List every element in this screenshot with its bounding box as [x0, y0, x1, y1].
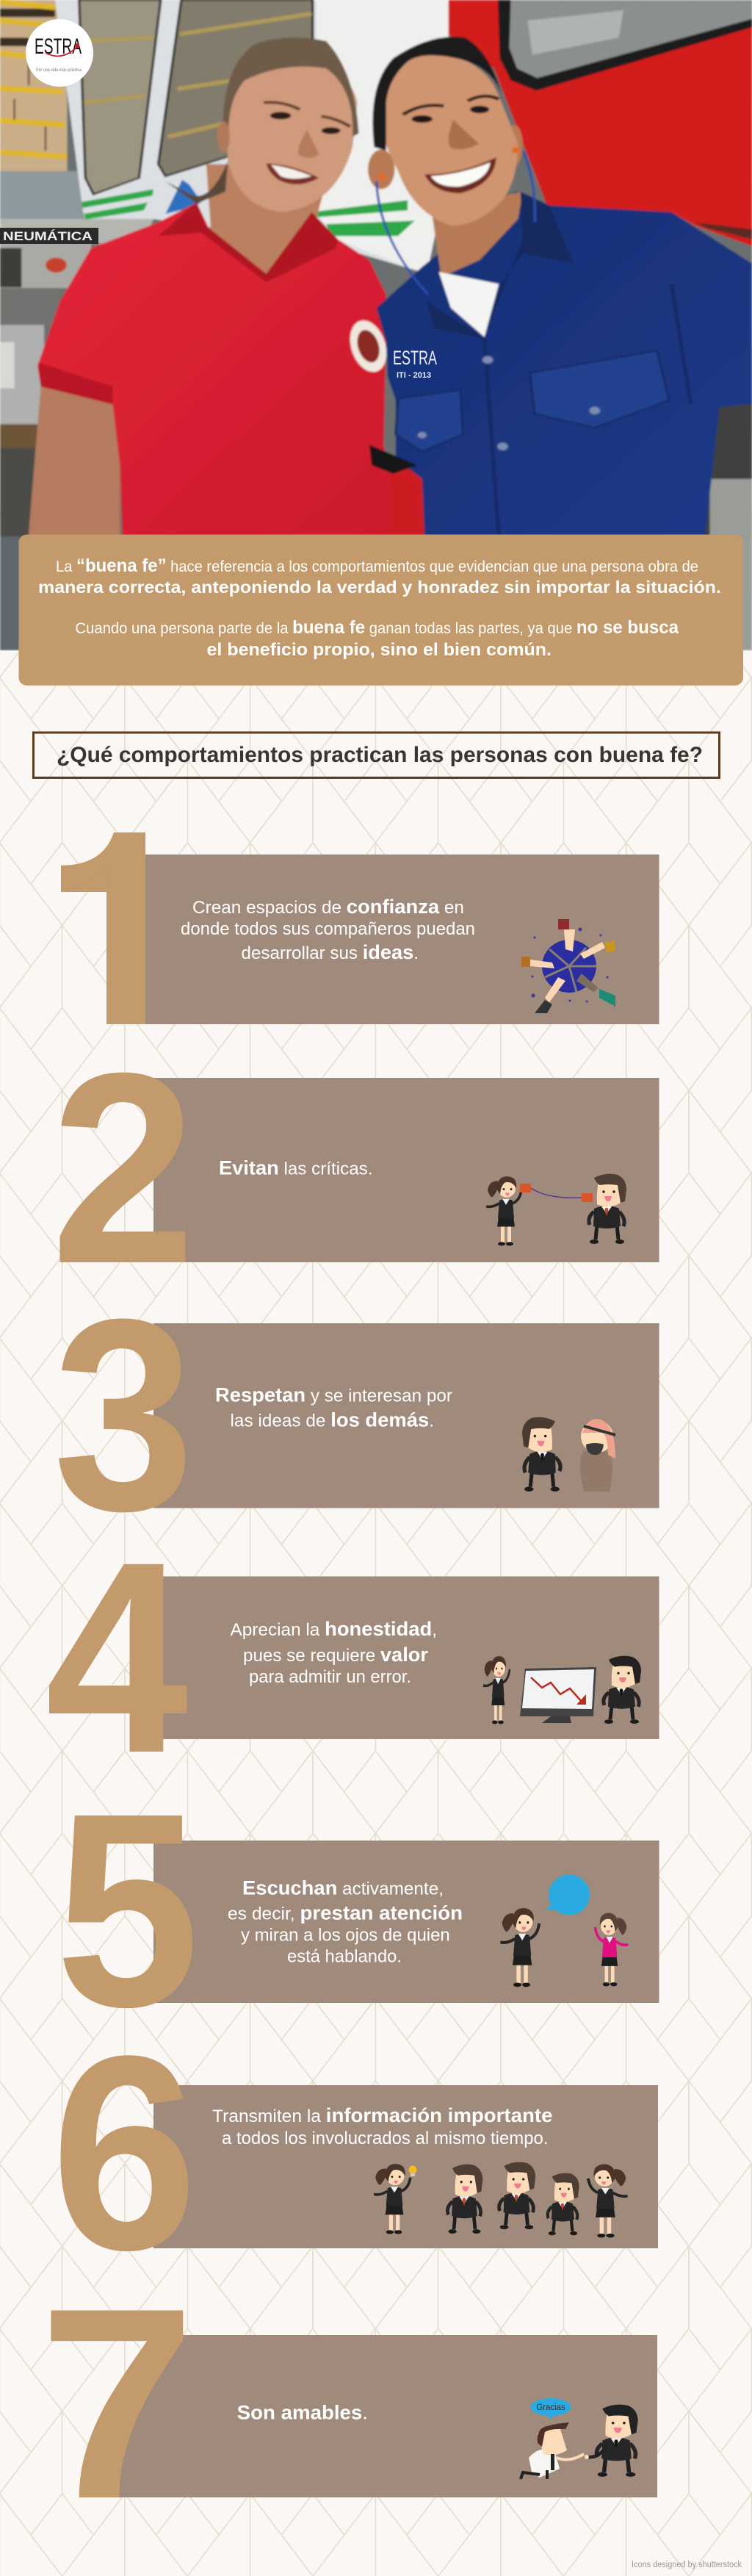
banner 4: [162, 1577, 659, 1739]
number 6: 6: [51, 1998, 198, 2308]
icon: handshake and thank-you bubble: Gracias: [536, 2403, 565, 2412]
shirt logo: ITI - 2013: [397, 371, 431, 380]
icon: handshake and thank-you bubble: [521, 2398, 638, 2479]
number 1: [61, 832, 145, 1024]
banner 2: [153, 1078, 659, 1262]
text 1: desarrollar sus ideas.: [241, 941, 419, 963]
section heading: ¿Qué comportamientos practican las personas con buena fe?: [57, 743, 703, 767]
icon: monitor with falling chart: [483, 1656, 641, 1724]
item 4: [46, 1506, 659, 1810]
banner 5: [153, 1841, 659, 2003]
text 6: Transmiten la información importante: [212, 2104, 552, 2126]
banner 3: [153, 1323, 659, 1508]
section heading: [34, 733, 720, 777]
icon: tin can phone: [486, 1174, 626, 1245]
intro line 4: el beneficio propio, sino el bien común.: [207, 640, 552, 660]
text 6: [212, 2104, 552, 2148]
item 3: [53, 1263, 659, 1568]
text 5: y miran a los ojos de quien: [241, 1925, 450, 1946]
item 5: [56, 1756, 659, 2065]
text 5: Escuchan activamente,: [242, 1877, 444, 1899]
text 3: [215, 1384, 452, 1431]
text 4: pues se requiere valor: [243, 1644, 428, 1666]
text 3: las ideas de los demás.: [231, 1409, 434, 1431]
text 7: Son amables.: [237, 2401, 368, 2423]
text 6: a todos los involucrados al mismo tiempo.: [222, 2129, 548, 2148]
banner 1: [145, 855, 659, 1024]
text 2: Evitan las críticas.: [219, 1156, 373, 1179]
text 3: Respetan y se interesan por: [215, 1384, 452, 1406]
shirt logo: ESTRA: [393, 347, 437, 369]
text 1: Crean espacios de confianza en: [192, 896, 464, 918]
number 5: 5: [56, 1756, 200, 2065]
banner 6: [153, 2085, 658, 2248]
text 4: [231, 1618, 437, 1687]
number 1: 1: [43, 777, 196, 1083]
label: Neumática: NEUMÁTICA: [3, 229, 93, 243]
shirt logo: [393, 347, 437, 380]
intro panel: [19, 535, 743, 686]
text 4: Aprecian la honestidad,: [231, 1618, 437, 1640]
banner 7: [95, 2335, 657, 2497]
item 6: [51, 1998, 658, 2308]
text 5: está hablando.: [287, 1947, 402, 1966]
intro line 3: Cuando una persona parte de la buena fe ganan todas las partes, ya que no se busca: [75, 617, 679, 638]
number 2: 2: [51, 1016, 196, 1320]
icon: hands on puzzle circle: [521, 919, 615, 1013]
text 1: donde todos sus compañeros puedan: [181, 919, 475, 939]
number 4: 4: [46, 1506, 190, 1810]
icon: team of five with light bulb: [374, 2162, 628, 2237]
icon: two men talking: [522, 1417, 615, 1492]
item 7: [39, 2251, 657, 2555]
label: Neumática: [0, 228, 98, 244]
logo badge: ESTRA: [35, 35, 82, 59]
text 4: para admitir un error.: [249, 1667, 411, 1687]
logo badge: Por una vida más práctica: [36, 68, 82, 73]
number 7: 7: [39, 2251, 195, 2555]
text 5: [228, 1877, 463, 1966]
intro line 1: La “buena fe” hace referencia a los comportamientos que evidencian que una persona obra de: [56, 555, 698, 576]
icon: two women talking with speech bubble: [500, 1875, 628, 1987]
item 1: [61, 832, 659, 1024]
intro line 2: manera correcta, anteponiendo la verdad y honradez sin importar la situación.: [38, 578, 721, 597]
item 2: [51, 1016, 659, 1320]
text 5: es decir, prestan atención: [228, 1902, 463, 1924]
text 1: [181, 896, 475, 963]
logo badge: [26, 19, 93, 87]
hero photo: woman in red shirt and man in blue shirt: [0, 0, 752, 650]
number 3: 3: [53, 1263, 195, 1568]
